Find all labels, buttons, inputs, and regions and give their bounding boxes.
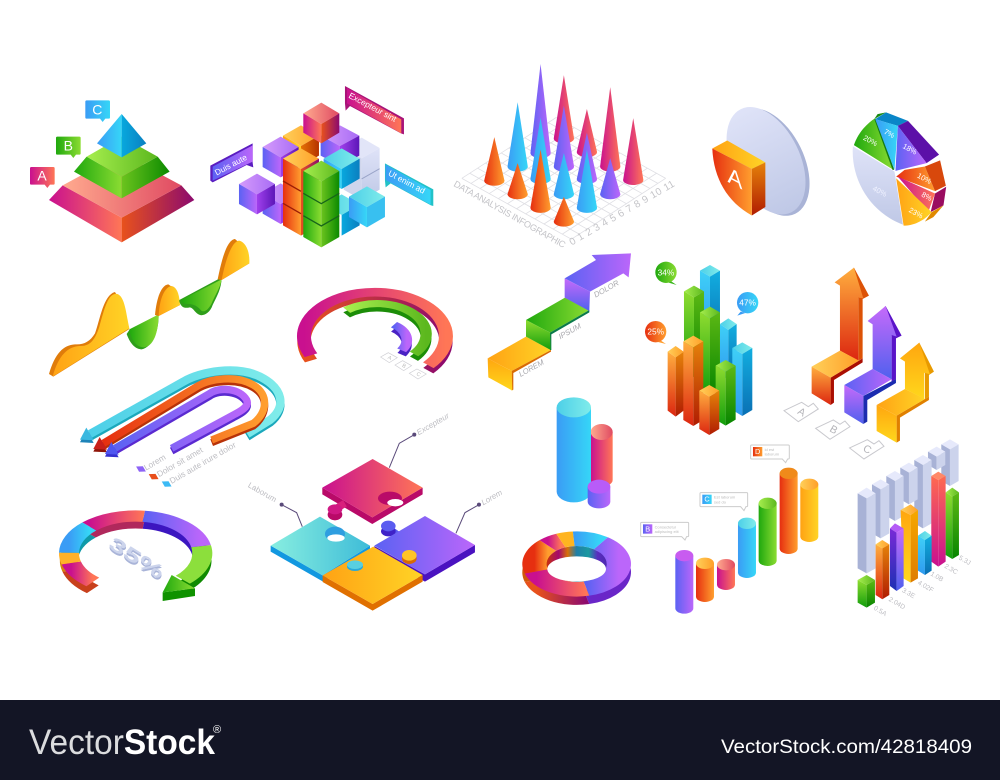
donut hole (547, 546, 607, 582)
iso grid (462, 117, 666, 239)
lower cyan column (324, 194, 360, 236)
footer bar (0, 700, 1000, 780)
lone purple cube (239, 174, 275, 214)
orange tower (283, 148, 319, 236)
slice 10% (896, 160, 946, 191)
step: Dolor (565, 253, 631, 311)
slice 7% (875, 112, 908, 170)
upward arrows chart (784, 268, 934, 459)
semicircular progress chart (304, 292, 446, 379)
stair arrow (488, 253, 631, 391)
puzzle chart (246, 411, 504, 611)
arc legend: B (401, 363, 407, 370)
lower purple cube (263, 183, 299, 224)
step: Lorem (488, 337, 551, 391)
donut side (534, 552, 619, 598)
step: Dolor: DOLOR (592, 278, 621, 299)
step: Ipsum: IPSUM (557, 321, 583, 341)
slice values: 20% (862, 133, 879, 148)
cylinder bar chart (641, 445, 818, 614)
step: Lorem: LOREM (517, 357, 546, 379)
slice 23% (896, 178, 943, 226)
teal piece (271, 517, 370, 581)
slice 18% (895, 121, 939, 171)
label B: B (64, 137, 73, 153)
label B: B (645, 524, 650, 533)
disc with shield A: A (727, 162, 742, 195)
bubble 34%: 34% (658, 267, 675, 277)
arrow tags: B (827, 423, 840, 437)
front cyan cube (349, 186, 385, 227)
tag: Excepteur sint (345, 86, 404, 134)
grid numbers: 0 1 2 3 4 5 6 7 8 9 10 11 (568, 179, 677, 248)
label D: id est (765, 447, 775, 452)
slice 20% (854, 112, 893, 170)
bar values: 2.3C (943, 563, 959, 576)
pink cylinder (591, 424, 613, 487)
arc legend: C (415, 371, 421, 378)
purple arrow (105, 389, 247, 457)
pyramid chart (30, 100, 194, 242)
bubble 25%: 25% (647, 327, 665, 337)
ring side (69, 523, 202, 589)
slice values: 10% (916, 171, 933, 186)
label C: sed do (714, 499, 727, 504)
disc with shield A (710, 94, 826, 229)
bar values: 0.5A (872, 605, 888, 618)
slice 8% (898, 177, 946, 212)
label A (30, 167, 55, 188)
bar values: 2.04D (887, 596, 906, 611)
leader: Laborum (246, 481, 302, 527)
image id: VectorStock.com/42818409 (721, 737, 972, 758)
label B (56, 137, 81, 158)
tag: Excepteur sint: Excepteur sint (347, 90, 399, 124)
arrow A (812, 268, 869, 405)
cones (484, 64, 643, 227)
legend: Lorem (142, 452, 167, 472)
leader: Excepteur (389, 411, 451, 468)
circular arrow chart 35% (69, 516, 202, 601)
outer arc (304, 292, 446, 371)
leader: Laborum: Laborum (246, 481, 278, 504)
inner arc (394, 325, 407, 355)
label D: laborum (765, 452, 780, 457)
orange arrow (93, 379, 265, 452)
bubble 34% (655, 262, 677, 285)
ring top (69, 516, 202, 582)
arrow tags (784, 402, 884, 459)
slice values: 18% (901, 142, 919, 157)
coloured lower bars (858, 472, 959, 608)
pie chart (853, 112, 946, 226)
upper purple cube (263, 137, 299, 177)
top pink cube (303, 103, 339, 143)
bar values: 5.3J (957, 555, 972, 567)
label C (85, 100, 110, 122)
bubble 25% (645, 321, 666, 344)
leader: Excepteur: Excepteur (415, 411, 451, 437)
pink piece (322, 459, 423, 524)
cyan cube (324, 148, 360, 189)
isometric cubes chart (210, 86, 433, 247)
label D: D (755, 447, 760, 456)
cyan arrow (80, 370, 280, 443)
arrow B (844, 306, 902, 424)
bubble 47% (737, 292, 758, 316)
tag: Ut enim ad (385, 163, 433, 206)
tag: Duis aute (210, 143, 253, 182)
legend: Dolor sit amet (155, 444, 205, 479)
label D (751, 445, 789, 463)
middle arc (347, 304, 426, 359)
purple piece (374, 516, 475, 582)
3D bar chart with percent bubbles (645, 262, 758, 435)
value 35%: 35% (105, 535, 168, 585)
cylinder trio (557, 397, 613, 508)
legend: Duis aute irure dolor (168, 439, 238, 486)
slice 40% (853, 146, 903, 225)
arc legend: A (386, 355, 393, 362)
value 35%: 35% (105, 533, 168, 583)
grey upper bars (858, 439, 959, 573)
brand logo: VectorStock (29, 723, 216, 762)
bar values: 4.02F (916, 580, 935, 594)
label B: adipiscing elit (655, 529, 679, 534)
slice values: 23% (907, 205, 925, 221)
legend (136, 439, 238, 487)
grid caption: DATA ANALYSIS INFOGRAPHIC (452, 179, 568, 250)
step: Ipsum (526, 298, 589, 350)
arrow tags: C (861, 443, 874, 457)
registered mark: ® (213, 724, 221, 736)
back purple cube (321, 125, 359, 166)
slice values (862, 127, 934, 221)
label B: Consectetur (655, 524, 677, 529)
back orange cube (283, 125, 319, 166)
leader: Lorem (456, 488, 504, 533)
bar values: 1.0B (929, 571, 945, 584)
slice values: 40% (871, 184, 889, 199)
label C: C (704, 495, 710, 504)
tag: Ut enim ad: Ut enim ad (387, 168, 427, 196)
arrow head (163, 575, 195, 601)
bar values: 3.3E (901, 587, 916, 601)
leader: Lorem: Lorem (480, 488, 504, 507)
donut top (534, 539, 619, 589)
grey tower (344, 138, 380, 200)
label C: C (92, 101, 102, 117)
bubble 47%: 47% (739, 298, 757, 308)
donut chart (534, 539, 619, 598)
U-shaped arrows chart (80, 370, 280, 487)
slice values: 8% (920, 190, 934, 203)
teal tab (347, 560, 363, 571)
cone chart (452, 64, 677, 250)
label B (641, 522, 689, 540)
arrow C (877, 343, 934, 443)
orange piece (323, 547, 423, 611)
green tower (303, 161, 339, 247)
cyan cylinder (557, 397, 591, 502)
purple cylinder (588, 480, 610, 508)
label C (700, 493, 748, 511)
label C: Est laborum (714, 495, 736, 500)
bar values (872, 555, 972, 618)
tag: Duis aute: Duis aute (213, 152, 249, 177)
slice values: 7% (882, 127, 896, 140)
arrow tags: A (795, 405, 808, 420)
paired bar chart (858, 439, 972, 618)
arc legend (381, 353, 426, 379)
wave area chart (49, 239, 249, 377)
label A: A (37, 167, 47, 183)
